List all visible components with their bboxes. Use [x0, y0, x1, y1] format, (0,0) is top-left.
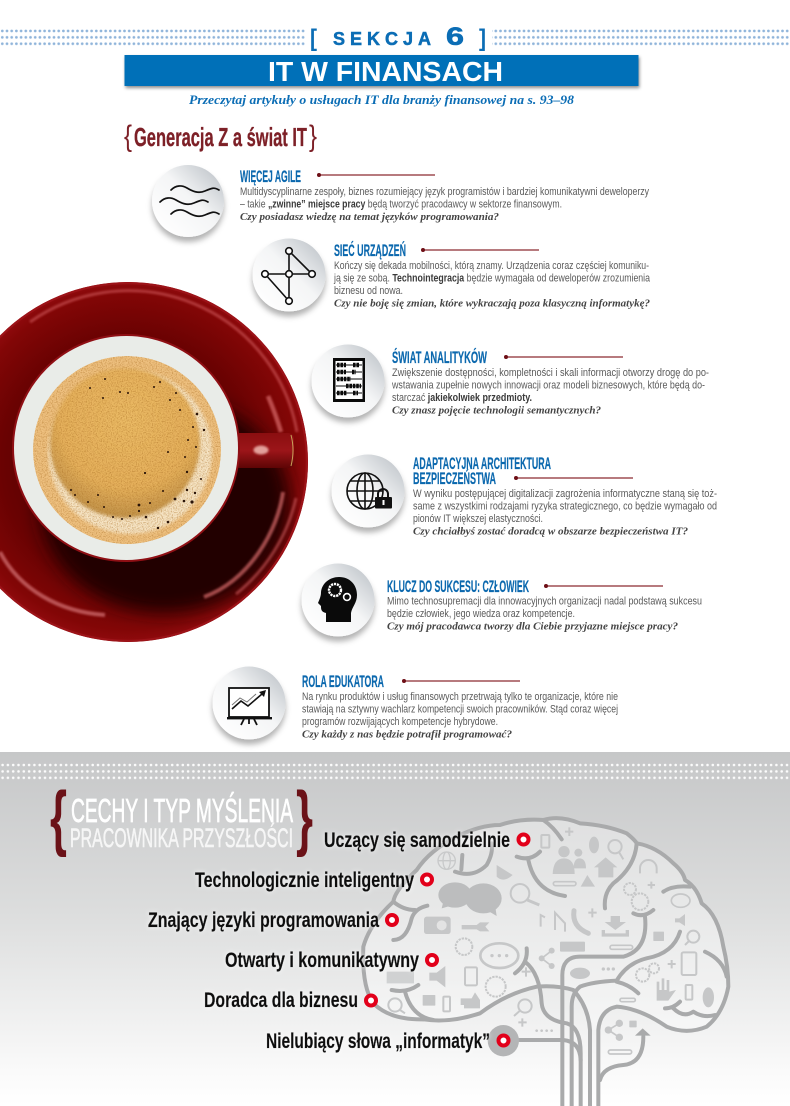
house — [594, 857, 617, 877]
connector line — [317, 173, 435, 177]
connector line — [402, 679, 520, 683]
coffee crema — [33, 356, 221, 544]
item: Sieć urządzeń — [252, 238, 651, 312]
section header: [ — [310, 25, 317, 52]
body text: – takie „zwinne” miejsce pracy będą tworzyć pracodawcy w sektorze finansowym. — [240, 198, 562, 210]
heading: Cechy i typ myślenia: PRACOWNIKA PRZYSZŁOŚCI — [70, 821, 293, 853]
heading: Cechy i typ myślenia: } — [296, 778, 313, 858]
loudspeaker — [429, 966, 445, 987]
heading: Generacja Z a świat IT — [124, 120, 317, 153]
technology icons — [387, 827, 714, 1054]
heading: Cechy i typ myślenia — [50, 778, 313, 858]
heading: Cechy i typ myślenia: CECHY I TYP MYŚLENIA — [71, 791, 293, 829]
body text: stawiają na sztywny wachlarz kompetencji swoich pracowników. Stąd coraz więcej — [302, 704, 618, 716]
body text: wstawania zupełnie nowych innowacji oraz modeli biznesowych, które będą do- — [391, 380, 705, 392]
body text: Multidyscyplinarne zespoły, biznes rozumiejący język programistów i bardziej komunikatywni deweloperzy — [240, 186, 649, 198]
icon: abacus — [312, 344, 384, 418]
body text: Czy znasz pojęcie technologii semantycznych? — [392, 406, 601, 416]
body text: Czy mój pracodawca tworzy dla Ciebie przyjazne miejsce pracy? — [387, 622, 678, 632]
body text: same z wszystkimi rodzajami ryzyka strategicznego, co będzie wymagało od — [413, 500, 717, 512]
trait: Znający języki programowania: Znający języki programowania — [148, 909, 379, 932]
body text: Kończy się dekada mobilności, którą znamy. Urządzenia coraz częściej komuniku- — [334, 260, 649, 272]
heading: ROLA EDUKATORA — [302, 672, 384, 691]
body text: będzie człowiek, jego wiedza oraz kompetencje. — [387, 608, 575, 620]
arrow head — [635, 1028, 651, 1036]
connector line — [421, 248, 539, 252]
heading: Cechy i typ myślenia: { — [50, 778, 67, 858]
icon: waves — [152, 165, 224, 237]
body text: Czy chciałbyś zostać doradcą w obszarze bezpieczeństwa IT? — [413, 526, 688, 538]
icon: network — [252, 238, 326, 312]
wrench — [462, 922, 489, 931]
heading: ADAPTACYJNA ARCHITEKTURA — [413, 454, 551, 473]
body text — [387, 596, 702, 632]
trait: Doradca dla biznesu: Doradca dla biznesu — [204, 989, 358, 1012]
icon: presentation board — [212, 666, 286, 740]
subtitle: Przeczytaj artykuły o usługach IT dla branży finansowej na s. 93–98 — [189, 92, 575, 107]
heading: Generacja Z a świat IT: { — [124, 120, 132, 153]
body text: biznesu od nowa. — [334, 285, 403, 297]
heading: Generacja Z a świat IT: Generacja Z a świat IT — [134, 122, 307, 152]
coffee cup on saucer — [0, 282, 308, 642]
trait: Nielubiący słowa informatyk: Nielubiący słowa „informatyk” — [266, 1030, 490, 1053]
share icons — [539, 948, 623, 1041]
headphones — [640, 860, 657, 873]
body text: Mimo technosupremacji dla innowacyjnych organizacji nadal podstawą sukcesu — [387, 596, 702, 608]
title banner: IT W FINANSACH — [268, 56, 503, 87]
section header — [0, 23, 790, 52]
body text: Zwiększenie dostępności, kompletności i skali informacji otworzy drogę do po- — [392, 367, 709, 379]
trait: Uczący się samodzielnie: Uczący się samodzielnie — [324, 829, 510, 852]
body text — [302, 691, 618, 740]
item: Klucz do sukcesu — [302, 564, 702, 636]
link chains — [553, 882, 635, 1054]
small plus signs — [518, 827, 676, 1027]
body text: W wyniku postępującej digitalizacji zagrożenia informatyczne staną się toż- — [413, 488, 717, 500]
connector line — [544, 584, 663, 588]
cup handle — [234, 433, 294, 468]
body text — [413, 488, 717, 538]
heading: SIEĆ URZĄDZEŃ — [334, 241, 406, 260]
item: Rola edukatora — [212, 666, 618, 740]
globe — [438, 852, 455, 869]
devices — [443, 835, 696, 1011]
heading — [413, 454, 551, 488]
speech bubbles — [438, 882, 502, 916]
item: Adaptacyjna architektura bezpieczeństwa — [332, 454, 717, 538]
people — [553, 846, 586, 874]
chat bubble — [480, 894, 690, 968]
body text: pionów IT większej elastyczności. — [413, 513, 543, 525]
brain diagram — [363, 818, 728, 1106]
icon: globe with padlock — [332, 454, 404, 528]
heading: WIĘCEJ AGILE — [240, 167, 301, 186]
music notes — [541, 913, 565, 932]
camera — [424, 917, 451, 934]
padlocks — [423, 932, 664, 1027]
icon: head with gears — [302, 564, 374, 636]
section header: 6 — [446, 23, 464, 51]
keyboard — [560, 942, 585, 952]
heading: ŚWIAT ANALITYKÓW — [392, 348, 488, 367]
telephone — [574, 911, 588, 933]
trait: Technologicznie inteligentny: Technologicznie inteligentny — [195, 869, 414, 892]
section header: SEKCJA — [333, 29, 431, 49]
body text — [240, 186, 649, 223]
body text: Czy nie boję się zmian, które wykraczają poza klasyczną informatykę? — [334, 298, 650, 310]
warning sign — [581, 875, 595, 887]
body text: Czy posiadasz wiedzę na temat języków programowania? — [240, 212, 499, 223]
body text: ją się ze sobą. Technointegracja będzie wymagała od deweloperów zrozumienia — [333, 272, 651, 284]
heading: KLUCZ DO SUKCESU: CZŁOWIEK — [387, 577, 529, 596]
section header: ] — [479, 25, 486, 52]
satellite dish — [497, 865, 513, 880]
body text: Na rynku produktów i usług finansowych przetrwają tylko te organizacje, które nie — [302, 691, 618, 703]
hand — [657, 978, 676, 1001]
body text: starczać jakiekolwiek przedmioty. — [392, 392, 532, 404]
brain circuit lines — [363, 818, 728, 1106]
gears — [456, 883, 659, 997]
saucer — [0, 282, 308, 642]
body text — [391, 367, 709, 416]
body text: Czy każdy z nas będzie potrafił programować? — [302, 730, 512, 740]
body text — [333, 260, 651, 310]
arrow dots — [535, 967, 615, 1032]
hub behind last bullet — [488, 1025, 519, 1056]
trait: Otwarty i komunikatywny: Otwarty i komunikatywny — [225, 949, 419, 972]
magnifiers — [388, 840, 699, 1016]
item: Więcej agile — [152, 165, 649, 237]
mouse — [570, 837, 714, 1007]
cup rim — [13, 335, 239, 561]
heading: Generacja Z a świat IT: } — [309, 120, 317, 153]
body text: programów rozwijających kompetencje hybrydowe. — [302, 716, 498, 728]
envelope — [387, 972, 414, 983]
item: Świat analityków — [312, 344, 709, 418]
connector line — [504, 355, 623, 359]
panel: traits of the future employee — [0, 752, 790, 1106]
title banner — [124, 55, 638, 87]
connector line — [514, 476, 633, 480]
heading: BEZPIECZEŃSTWA — [413, 469, 496, 488]
download tray — [602, 916, 629, 937]
